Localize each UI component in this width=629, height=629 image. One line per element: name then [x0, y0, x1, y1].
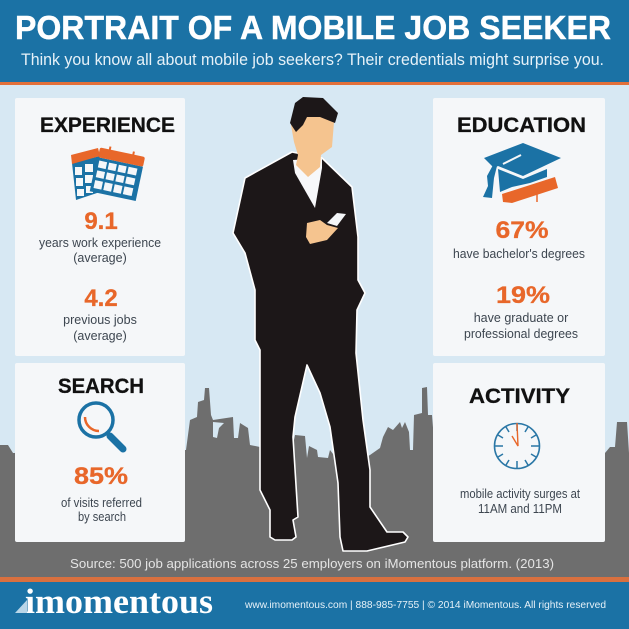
heading: EDUCATION [457, 114, 586, 137]
panel: activity [433, 363, 605, 542]
panel: education [433, 98, 605, 356]
footer band [0, 577, 629, 629]
stat label: have bachelor's degrees [453, 247, 585, 261]
icon: calendars [71, 144, 146, 201]
panel: experience [15, 98, 185, 356]
stat label: of visits referred [61, 496, 142, 510]
stat: 85%: 85% [74, 463, 128, 490]
stat label: professional degrees [464, 327, 578, 341]
face and neck [291, 112, 334, 177]
stat label: have graduate or [474, 311, 568, 325]
stat label: previous jobs [63, 313, 137, 327]
stat label: by search [78, 510, 126, 524]
shirt [293, 158, 322, 208]
figure: man with phone [233, 97, 408, 551]
icon: graduation cap [483, 143, 561, 203]
logo dots [15, 600, 27, 613]
hair [290, 97, 338, 132]
stat label: (average) [73, 251, 127, 265]
phone [327, 213, 346, 226]
stat label: (average) [73, 329, 127, 343]
subtitle: Think you know all about mobile job seekers? Their credentials might surprise you. [21, 51, 604, 69]
suit silhouette [233, 152, 408, 551]
logo: imomentous [25, 582, 213, 621]
icon: magnifier [79, 403, 123, 449]
stat: 4.2: 4.2 [84, 285, 118, 312]
heading: SEARCH [58, 375, 144, 398]
hand [306, 220, 338, 244]
stat: 9.1: 9.1 [84, 208, 118, 235]
stat label: years work experience [39, 236, 161, 250]
title: PORTRAIT OF A MOBILE JOB SEEKER [15, 9, 611, 46]
stat: 67%: 67% [496, 217, 548, 244]
heading: EXPERIENCE [40, 114, 175, 137]
footer contact text: www.imomentous.com | 888-985-7755 | © 2014 iMomentous. All rights reserved [244, 599, 606, 611]
heading: ACTIVITY [469, 385, 570, 408]
panel: search [15, 363, 185, 542]
skyline [0, 387, 629, 578]
text: mobile activity surges at [460, 487, 580, 501]
source note: Source: 500 job applications across 25 employers on iMomentous platform. (2013) [70, 556, 554, 571]
text: 11AM and 11PM [478, 502, 562, 516]
header band [0, 0, 629, 85]
icon: clock [494, 423, 540, 468]
stat: 19%: 19% [496, 282, 550, 309]
